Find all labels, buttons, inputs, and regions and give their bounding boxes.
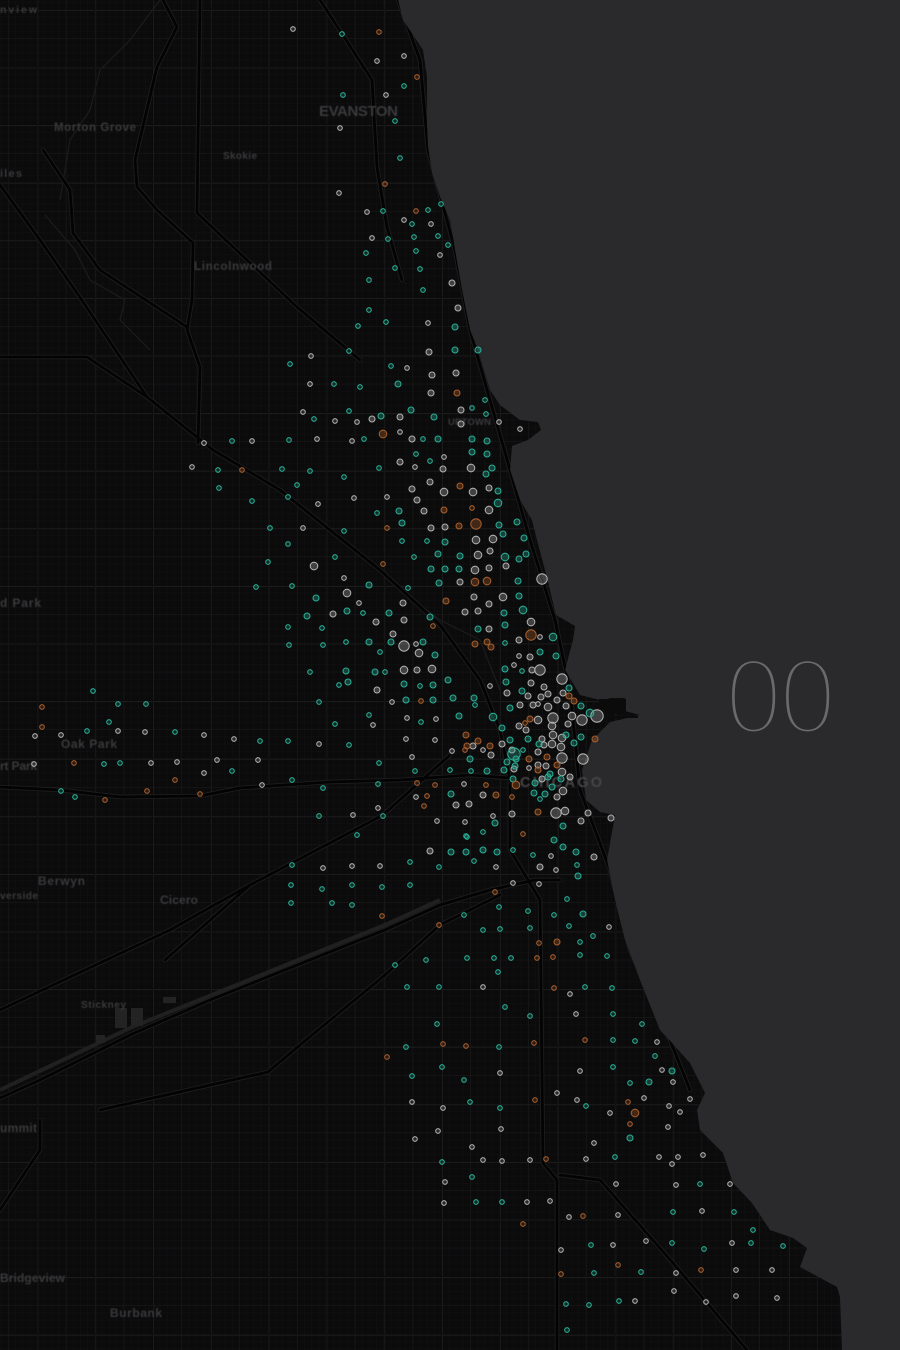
label: Chicago: CHICAGO bbox=[520, 775, 602, 791]
orange points bbox=[40, 30, 703, 1276]
label: Cicero: Cicero bbox=[160, 893, 198, 907]
label: ummit: ummit bbox=[0, 1121, 37, 1135]
north branch river outline bbox=[45, 0, 500, 690]
sanitary canal strip bbox=[0, 900, 440, 1090]
navy pier bbox=[600, 700, 638, 717]
label: rt Park: rt Park bbox=[0, 759, 37, 773]
label: iles: iles bbox=[0, 168, 22, 180]
label: Berwyn: Berwyn bbox=[38, 874, 85, 888]
place labels bbox=[0, 4, 602, 1320]
label: Oak Park: Oak Park bbox=[61, 737, 117, 751]
stickney plant blocks bbox=[96, 997, 176, 1043]
label: Morton Grove: Morton Grove bbox=[54, 122, 136, 134]
teal points bbox=[59, 32, 785, 1332]
grey points bbox=[32, 27, 779, 1304]
counter: 00: 00 bbox=[722, 643, 840, 754]
label: Bridgeview: Bridgeview bbox=[0, 1271, 66, 1285]
label: Lincolnwood: Lincolnwood bbox=[194, 261, 272, 273]
label: d Park: d Park bbox=[0, 596, 41, 610]
label: nview: nview bbox=[0, 4, 38, 16]
label: Burbank: Burbank bbox=[110, 1306, 162, 1320]
label: verside: verside bbox=[0, 891, 38, 902]
label: Uptown: UPTOWN bbox=[448, 417, 491, 428]
label: Skokie: Skokie bbox=[223, 151, 257, 162]
label: Stickney: Stickney bbox=[81, 1000, 126, 1011]
label: Evanston: EVANSTON bbox=[319, 103, 398, 120]
